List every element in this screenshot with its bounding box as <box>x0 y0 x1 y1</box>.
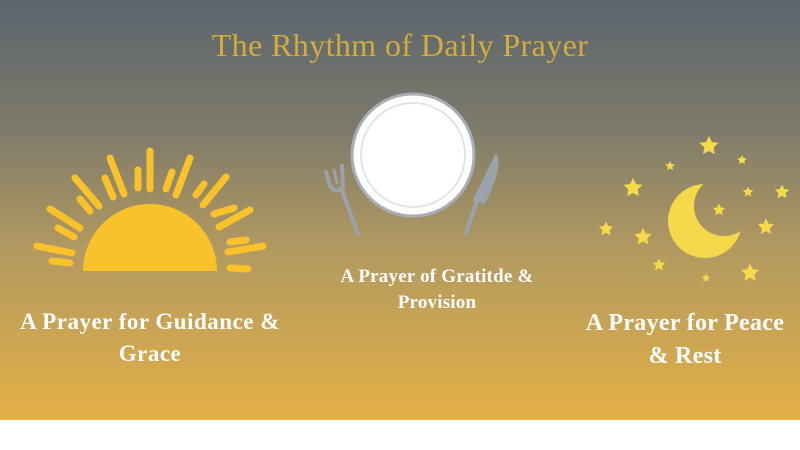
text: evening prayer <box>586 310 784 369</box>
text: morning prayer: Grace <box>119 341 181 366</box>
text: morning prayer <box>20 309 280 366</box>
text: morning prayer: A Prayer for Guidance & <box>20 309 280 334</box>
icon: crescent moon and stars <box>599 136 789 282</box>
text: meal prayer <box>340 266 533 313</box>
text: evening prayer: & Rest <box>648 343 722 369</box>
text: meal prayer: Provision <box>398 292 476 313</box>
text: evening prayer: A Prayer for Peace <box>586 310 784 336</box>
text: meal prayer: A Prayer of Gratitde & <box>341 266 533 287</box>
title: The Rhythm of Daily Prayer <box>212 27 588 63</box>
